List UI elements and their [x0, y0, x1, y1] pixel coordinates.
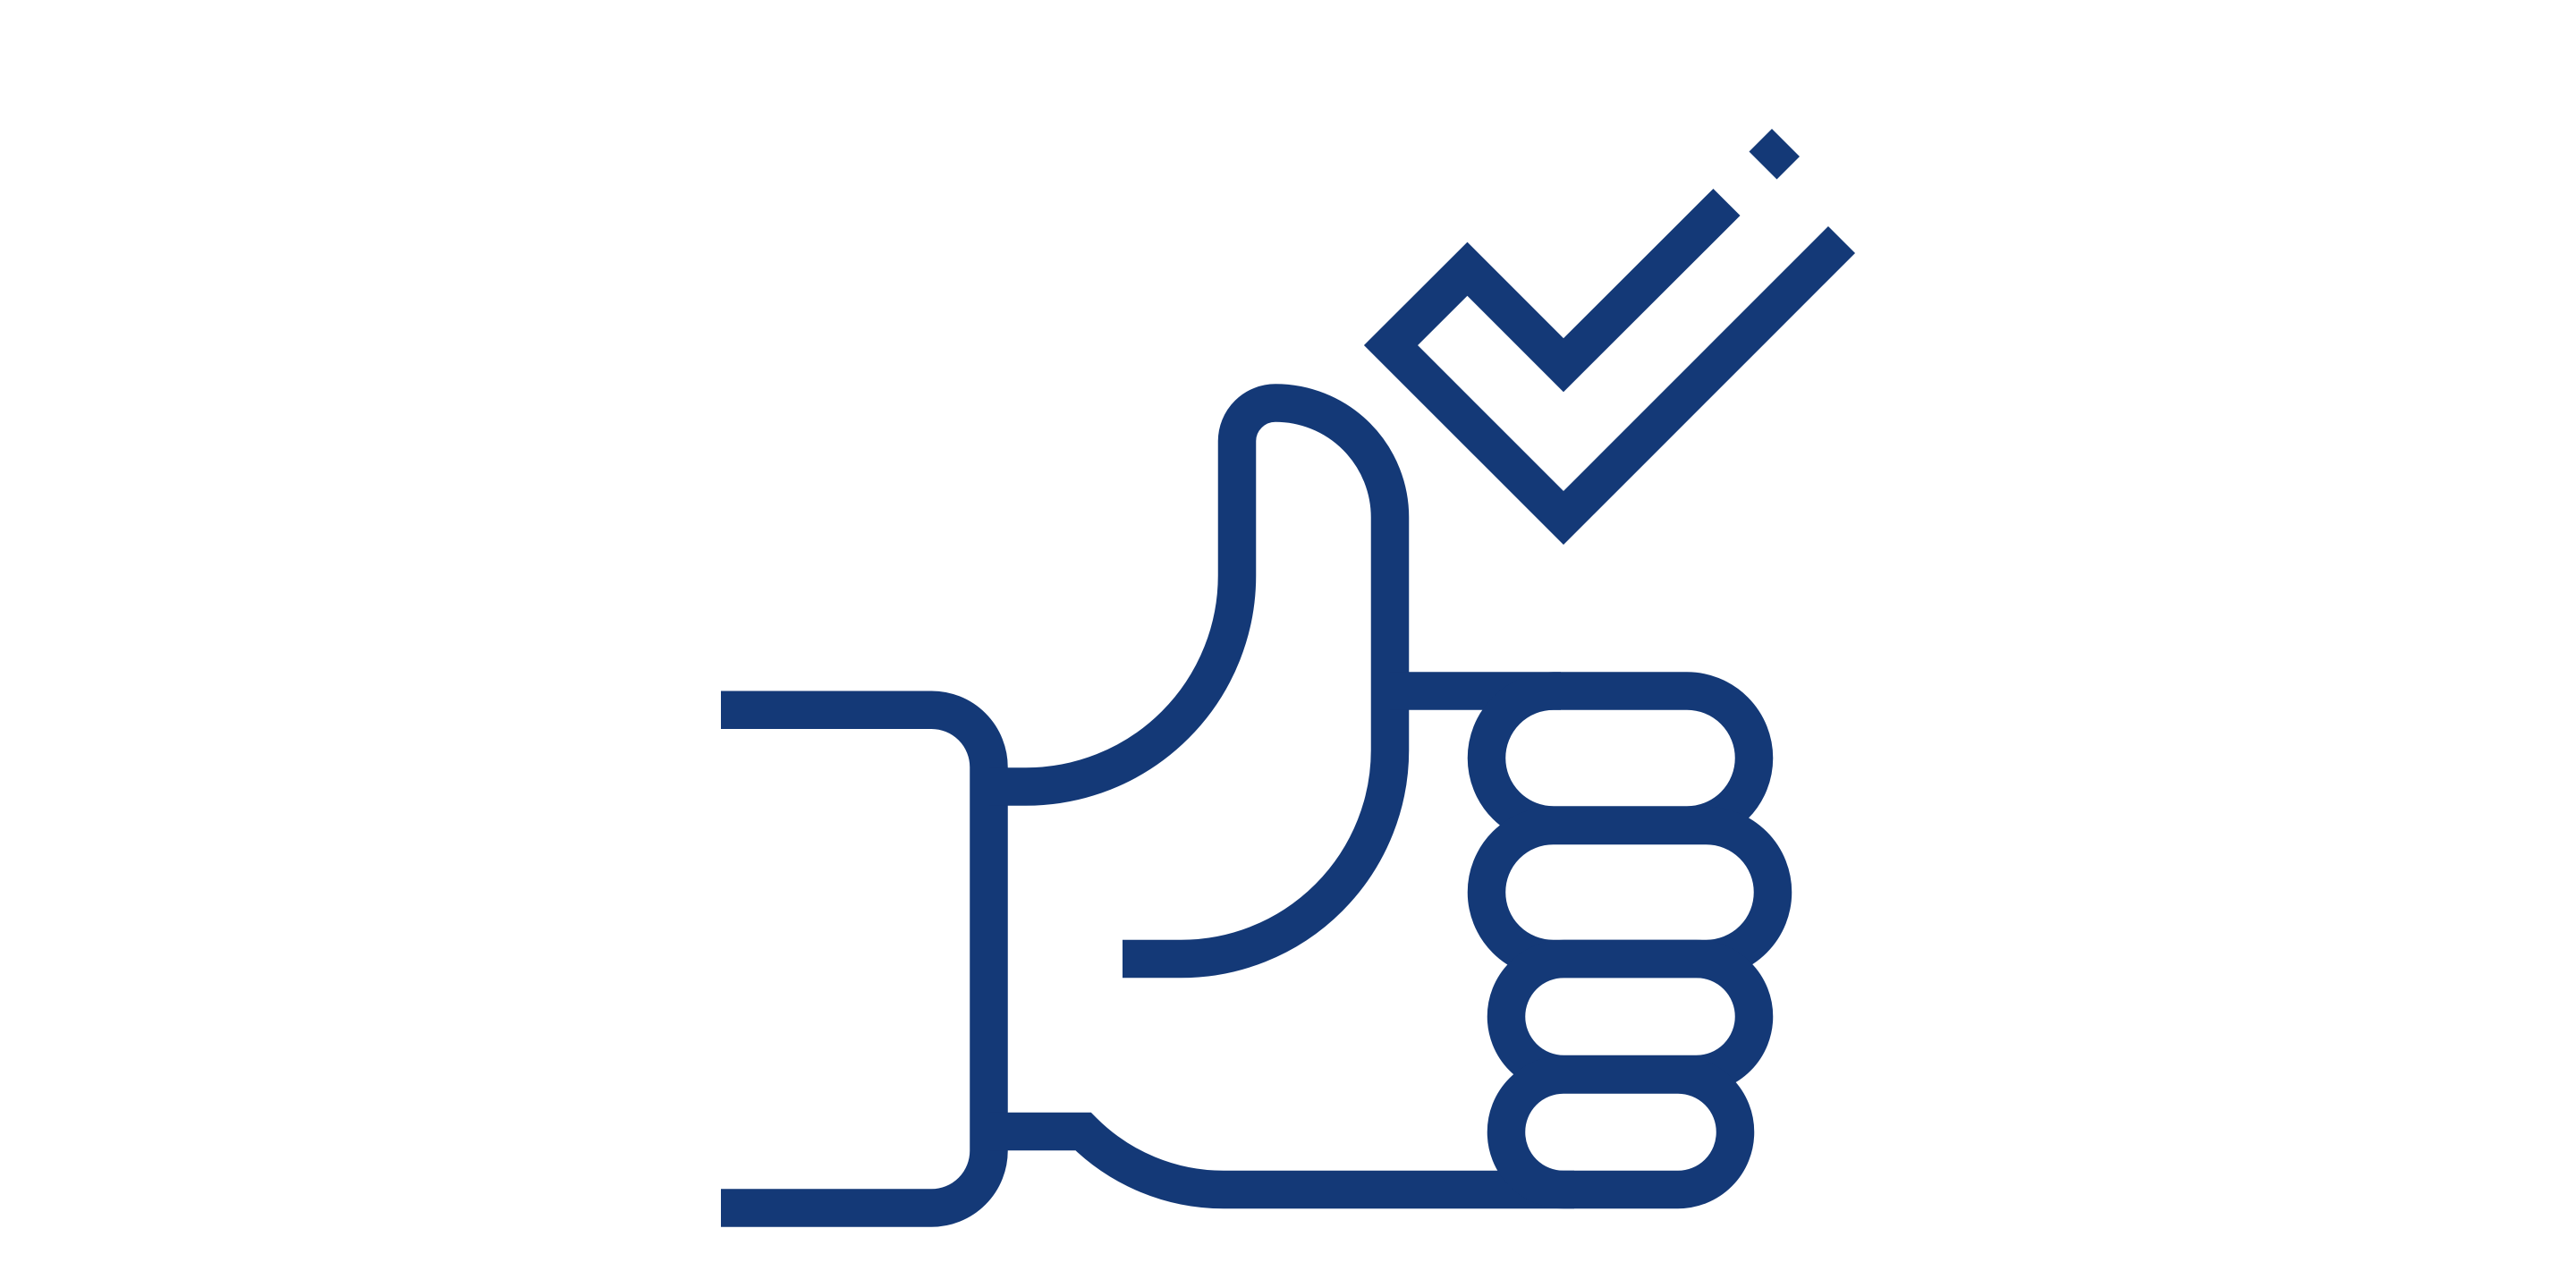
- icon: small diamond accent: [1750, 129, 1800, 179]
- icon: shirt cuff: [721, 710, 989, 1208]
- icon: thumb base to first finger: [1390, 672, 1561, 710]
- icon: fourth finger: [1506, 1075, 1735, 1190]
- icon: wrist and lower palm: [989, 1131, 1574, 1190]
- icon: check mark: [1391, 202, 1842, 518]
- icon: third finger: [1506, 959, 1754, 1074]
- icon: thumb: [989, 402, 1390, 959]
- icon group: [721, 202, 1842, 1208]
- icon: second finger: [1487, 826, 1773, 959]
- icon: first finger: [1487, 691, 1754, 825]
